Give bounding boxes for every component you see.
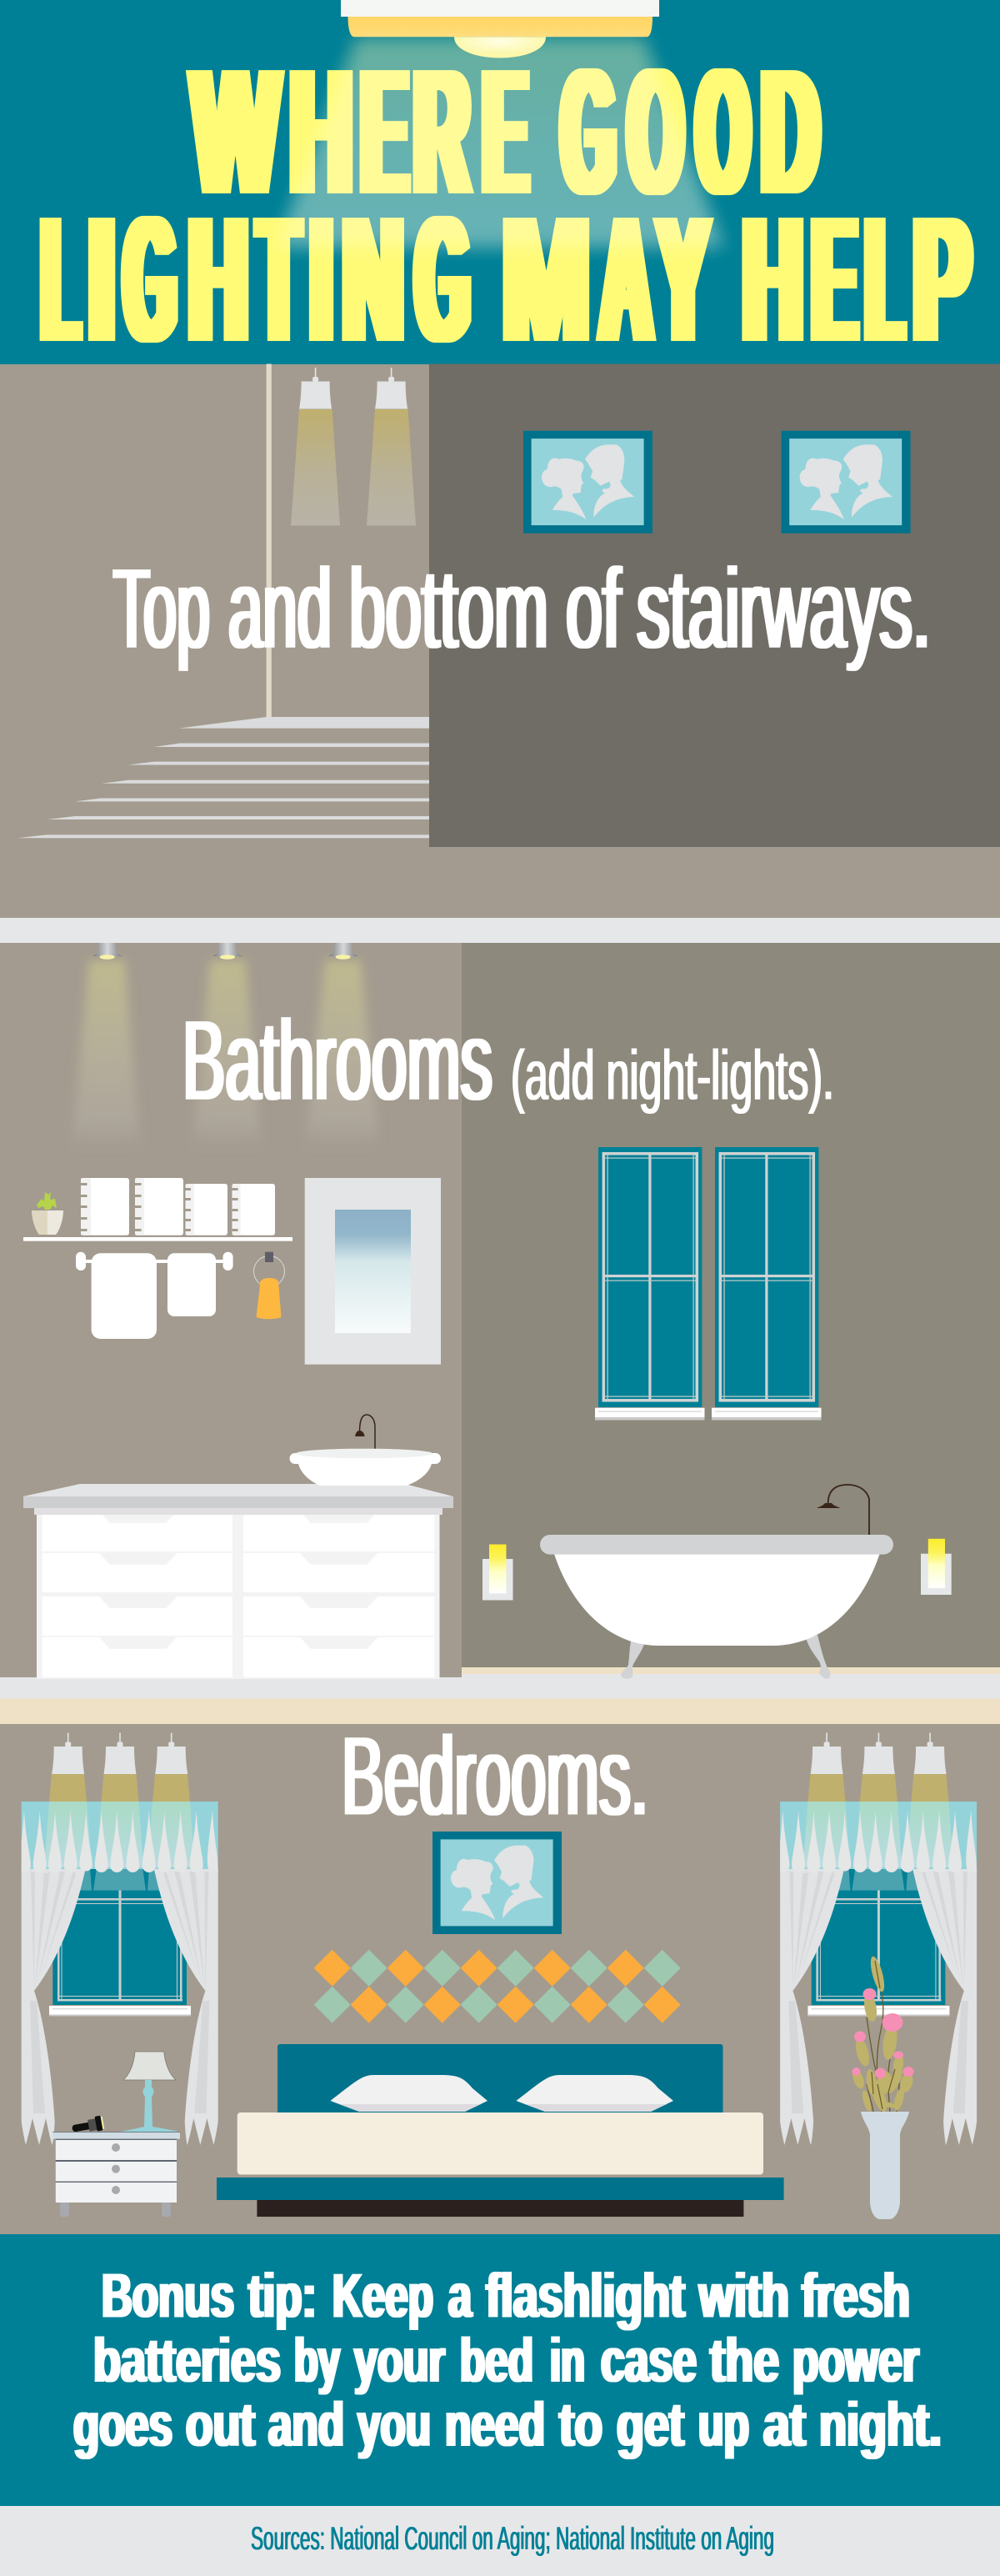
bonus tip text: Keep [332,2261,433,2331]
window 1 [595,1147,705,1420]
towel bar with towels [76,1252,233,1339]
title: N [343,178,403,379]
title: Y [658,178,708,379]
pendant light 2 [367,368,416,525]
stair post [267,363,272,717]
bonus tip text: power [792,2325,919,2395]
title: E [483,31,527,232]
title: L [867,178,902,379]
dark wall [429,363,1000,847]
mirror [305,1178,441,1365]
bathtub [540,1485,893,1679]
bonus tip text: case [601,2325,697,2395]
bonus tip text: and [268,2389,344,2459]
bonus tip text: flashlight [486,2261,685,2331]
panel: header background [0,0,1000,364]
panel: bedrooms [0,1714,1000,2234]
drawers [42,1515,434,1677]
title: G [562,31,615,232]
heading: stairways: bottom [349,545,548,672]
framed picture 2 [782,431,911,534]
panel: bonus tip [0,2234,1000,2506]
title: L [42,178,78,379]
left pendant lights [44,1732,195,1867]
bed base [257,2200,743,2217]
bonus tip text: need [445,2389,545,2459]
panel: stairways [0,363,1000,918]
divider band [0,1699,1000,1724]
bonus tip text: night. [819,2389,942,2459]
title: T [258,178,298,379]
icon: ceiling lamp [341,0,659,58]
bonus tip text: at [763,2389,806,2459]
title: I [88,178,115,379]
spotlight 3 [305,943,379,1149]
night-light left [482,1544,513,1601]
window 2 [712,1147,822,1420]
title [42,31,970,379]
folded towels on shelf [81,1178,275,1235]
bonus tip text: the [710,2325,779,2395]
vase [861,2112,909,2219]
pillow left [330,2075,488,2112]
bonus tip text: goes [73,2389,172,2459]
bonus tip text [73,2261,942,2459]
title: G [416,178,469,379]
bed [217,2044,784,2217]
heading: bedrooms: Bedrooms. [342,1714,648,1839]
title: A [600,178,652,379]
pillow right [516,2075,673,2112]
title: G [125,178,175,379]
bonus tip text: by [294,2325,340,2395]
heading: bathrooms: Bathrooms [182,997,492,1124]
mattress [238,2112,763,2174]
framed picture 3 [432,1832,562,1934]
bonus tip text: batteries [93,2325,281,2395]
bonus tip text: tip: [248,2261,317,2331]
potted plant [32,1192,63,1235]
table lamp [120,2052,179,2132]
bonus tip text: with [698,2261,789,2331]
bonus tip text: fresh [802,2261,910,2331]
bonus tip text: Bonus [102,2261,234,2331]
bonus tip text: bed [460,2325,533,2395]
basin and faucet [290,1415,441,1486]
bonus tip text: in [550,2325,585,2395]
right valance folds [780,1811,977,1872]
title: W [192,31,278,232]
bonus tip text: you [358,2389,431,2459]
flowers [850,1955,915,2113]
vanity counter [23,1484,453,1679]
heading: stairways: Top [113,545,210,672]
flashlight [71,2115,105,2136]
drawer handles [99,1515,378,1649]
bed platform [217,2178,784,2200]
panel: sources footer [0,2506,1000,2576]
night-light right [921,1539,952,1595]
right pendant lights [802,1732,953,1867]
title: H [743,178,802,379]
title: O [628,31,682,232]
light cone [277,38,723,247]
title: E [812,178,857,379]
bonus tip text: to [559,2389,602,2459]
bonus tip text: out [186,2389,255,2459]
left window with curtains [22,1802,218,2145]
stair steps [18,717,429,838]
light glow over title [277,38,723,247]
title: O [697,31,749,232]
bonus tip text: your [354,2325,445,2395]
towel ring with orange towel [253,1252,285,1319]
framed picture 1 [523,431,652,534]
diamond wall pattern [314,1950,681,2023]
title: H [189,178,248,379]
bonus tip text: up [698,2389,749,2459]
bonus tip text: get [617,2389,684,2459]
spotlight 1 [72,943,140,1149]
nightstand [52,2132,180,2218]
heading: stairways: and [228,545,332,672]
title: H [291,31,352,232]
title: R [414,31,469,232]
shelf [23,1237,292,1241]
left valance folds [22,1811,218,1872]
heading: stairways: of [566,545,621,672]
title: D [762,31,819,232]
title: M [502,178,590,379]
title: I [311,178,332,379]
panel: bathrooms [0,918,1000,1724]
pendant light 1 [291,368,340,525]
title: E [362,31,408,232]
spotlight 2 [192,943,261,1149]
right window with curtains [780,1802,977,2145]
bonus tip text: a [448,2261,472,2331]
